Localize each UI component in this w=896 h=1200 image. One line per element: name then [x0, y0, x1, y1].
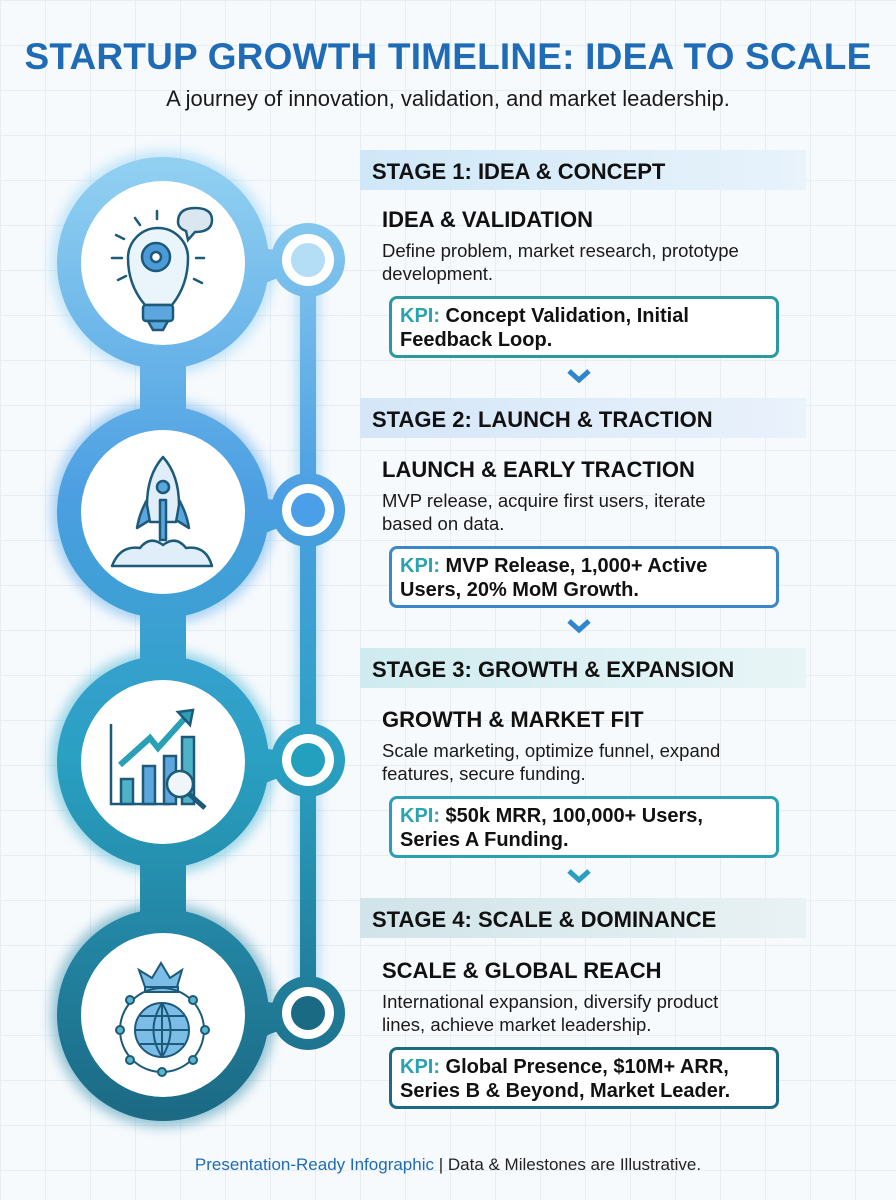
white inner discs: [81, 181, 334, 1097]
icon: crown globe: [116, 963, 209, 1076]
stage 3 header: [360, 648, 806, 688]
stage 4 header: [360, 898, 806, 938]
stage 3 KPI: KPI: $50k MRR, 100,000+ Users, Series A Funding.: [400, 805, 703, 851]
subtitle: A journey of innovation, validation, and market leadership.: [166, 86, 730, 111]
stage 1 description: Define problem, market research, prototype development.: [382, 240, 739, 284]
stage 2 description: MVP release, acquire first users, iterate based on data.: [382, 490, 706, 534]
stage 3 description: Scale marketing, optimize funnel, expand features, secure funding.: [382, 740, 720, 784]
icon: lightbulb: [112, 208, 212, 330]
stage 4 description: International expansion, diversify product lines, achieve market leadership.: [382, 991, 718, 1035]
timeline graphic: [42, 145, 345, 1136]
stage 2 header: STAGE 2: LAUNCH & TRACTION: [372, 407, 713, 432]
arrow: [567, 369, 591, 384]
stage 1 KPI: KPI: Concept Validation, Initial Feedback Loop.: [400, 305, 689, 351]
stage 4 KPI: KPI: Global Presence, $10M+ ARR, Series B & Beyond, Market Leader.: [400, 1056, 730, 1102]
stage 1 KPI: [389, 296, 779, 358]
stage 2 title: LAUNCH & EARLY TRACTION: [382, 457, 695, 482]
stage 1 header: STAGE 1: IDEA & CONCEPT: [372, 159, 665, 184]
stage 2 header: [360, 398, 806, 438]
footer: Presentation-Ready Infographic | Data & Milestones are Illustrative.: [195, 1155, 701, 1174]
stage 4 KPI: [389, 1047, 779, 1109]
node centers: [291, 243, 325, 277]
arrow: [567, 619, 591, 634]
stage 4 header: STAGE 4: SCALE & DOMINANCE: [372, 907, 716, 932]
stage 3 KPI: [389, 796, 779, 858]
icon: growth chart: [111, 710, 205, 808]
circle chain: [57, 157, 345, 1121]
vertical line: [300, 260, 316, 1020]
stage 3 title: GROWTH & MARKET FIT: [382, 707, 644, 732]
stage 2 KPI: KPI: MVP Release, 1,000+ Active Users, 20% MoM Growth.: [400, 555, 707, 601]
title: STARTUP GROWTH TIMELINE: IDEA TO SCALE: [25, 36, 871, 77]
stage 4 title: SCALE & GLOBAL REACH: [382, 958, 662, 983]
stage 3 header: STAGE 3: GROWTH & EXPANSION: [372, 657, 734, 682]
stage 1 header: [360, 150, 806, 190]
stage 2 KPI: [389, 546, 779, 608]
icon: rocket: [112, 457, 212, 566]
arrow: [567, 869, 591, 884]
stage 1 title: IDEA & VALIDATION: [382, 207, 593, 232]
